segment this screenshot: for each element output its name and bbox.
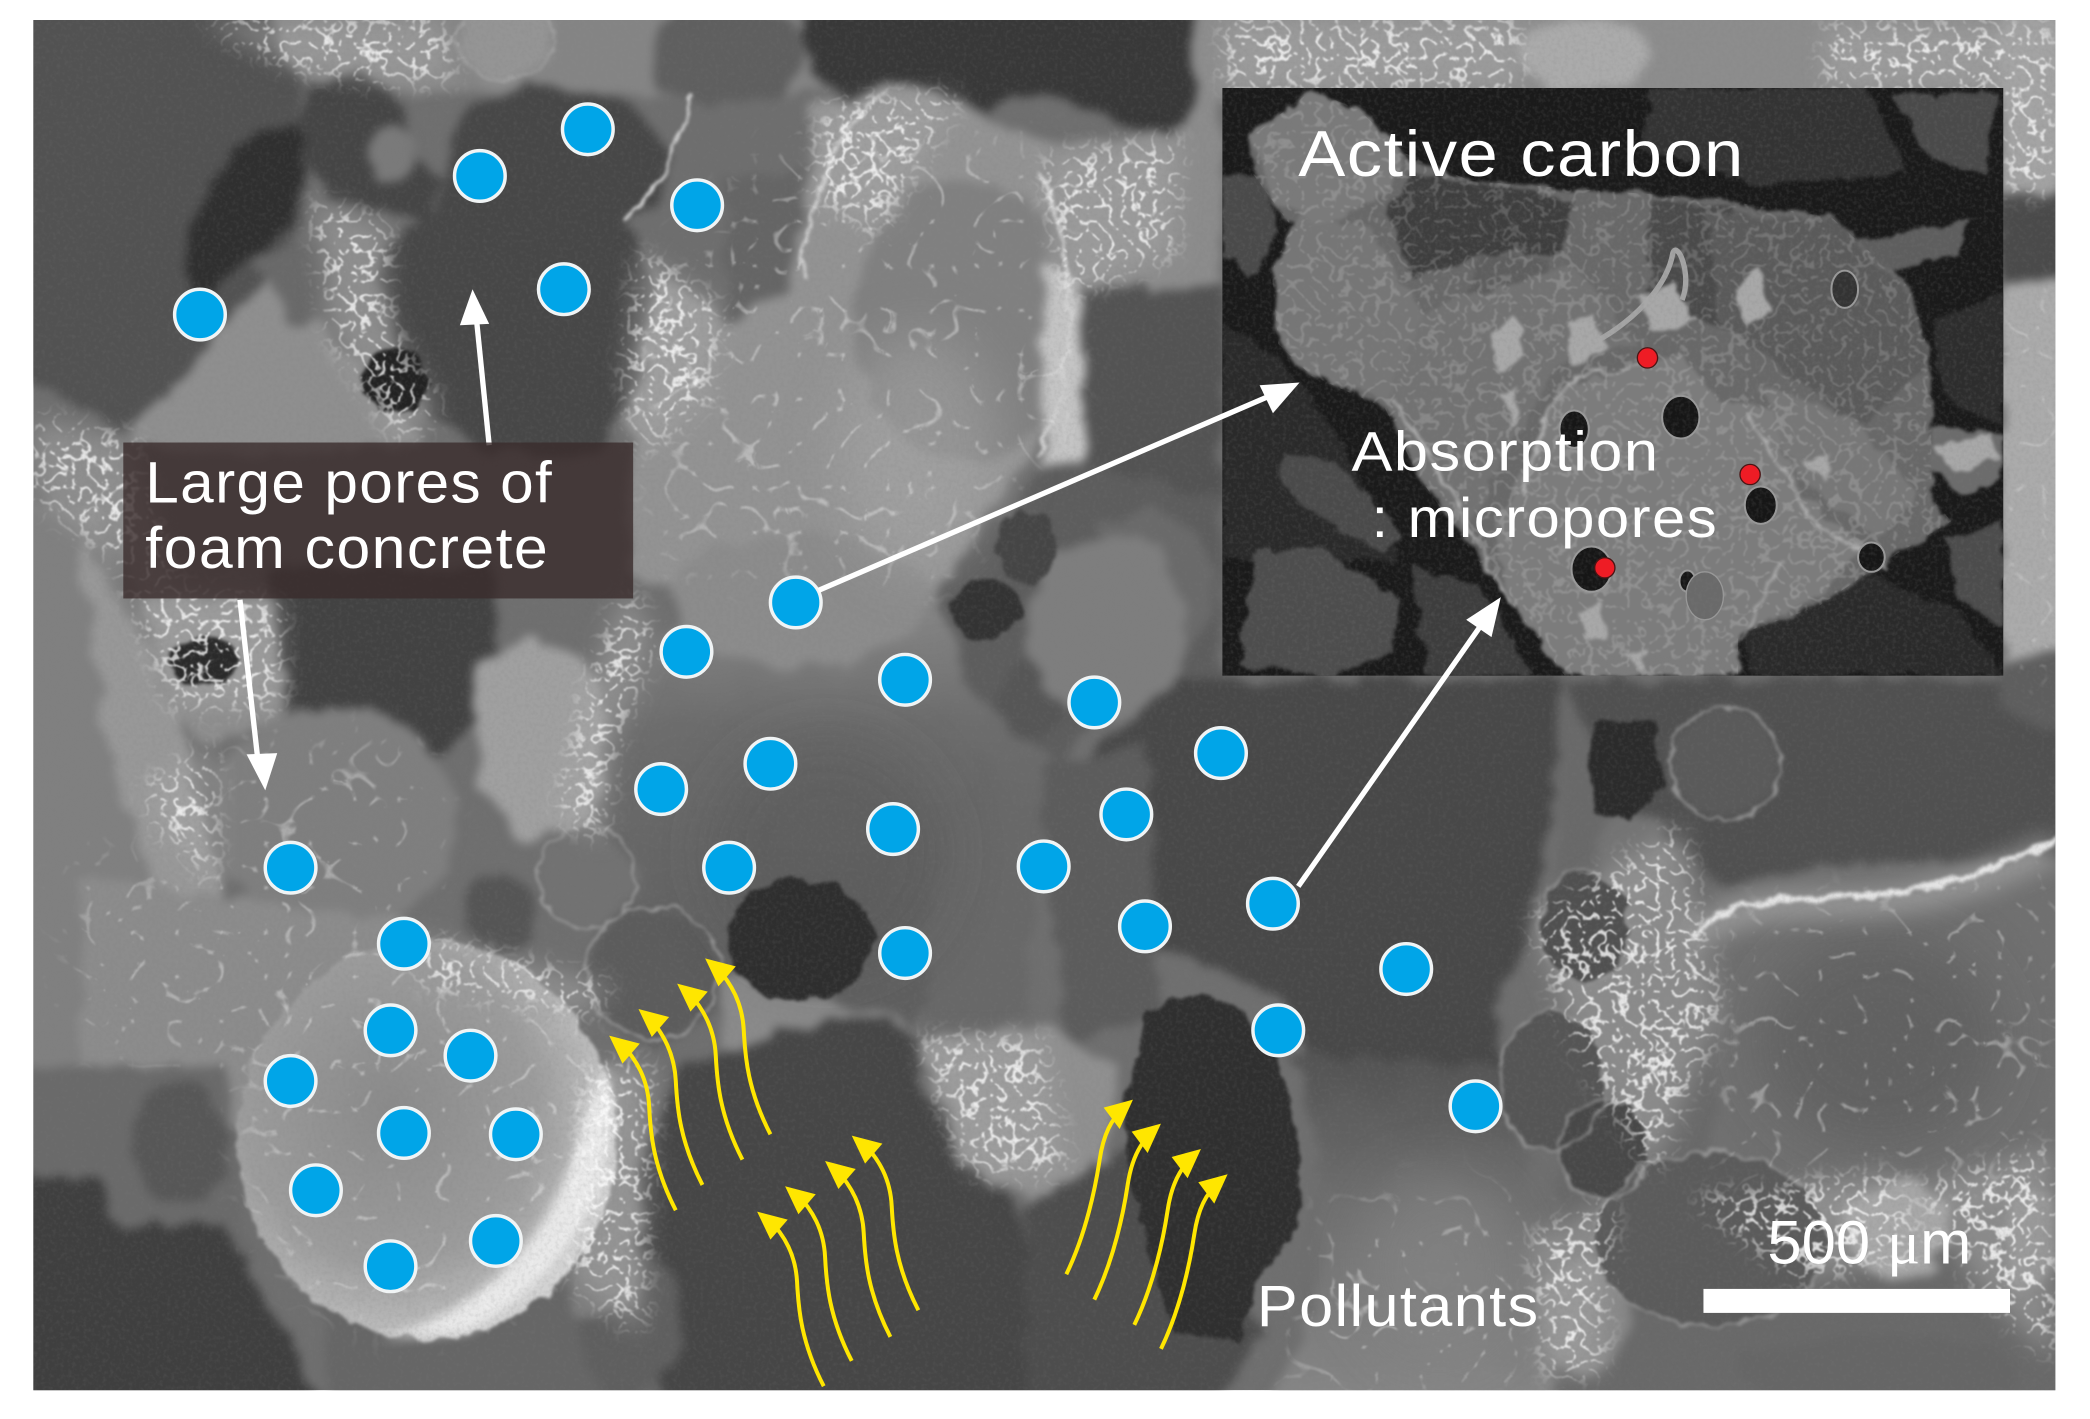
red dots: pollutants inside micropores (1595, 348, 1760, 578)
callout: large pores of foam concrete: Large pores of (145, 451, 553, 516)
label: active carbon: Active carbon (1298, 117, 1745, 190)
scale bar: 500 µm: 500 μm (1767, 1208, 1971, 1278)
blue dots: pollutant particles (175, 104, 1501, 1292)
arrow: to micropores (1298, 597, 1501, 886)
sphere bright rim (380, 1066, 611, 1340)
plate ridges (1393, 363, 1886, 640)
sphere outlines (459, 0, 1829, 1326)
scale bar: 500 µm (1703, 1208, 2010, 1313)
arrow: to lower pore (240, 600, 277, 790)
fibre (1579, 250, 1686, 349)
callout: large pores of foam concrete: foam concrete (145, 516, 549, 581)
arrow: to active carbon (818, 383, 1300, 590)
soft shading (706, 333, 1999, 1360)
label: absorption micropores: Absorption (1352, 420, 1659, 483)
yellow flow arrows: group 1 (609, 958, 770, 1210)
ridge glow (1693, 846, 2055, 940)
bright ridge lines (207, 93, 2055, 1333)
micropores (1559, 271, 1885, 592)
particle flakes (1493, 267, 1999, 673)
label: pollutants: Pollutants (1257, 1274, 1540, 1339)
yellow flow arrows: group 2 (757, 1136, 918, 1386)
label: absorption micropores: : micropores (1372, 486, 1718, 549)
yellow flow arrows: group 3 (1066, 1100, 1228, 1349)
dark spheres and holes (172, 347, 1829, 1344)
bright sphere lower left (237, 940, 616, 1340)
callout: large pores of foam concrete (123, 443, 633, 598)
arrow: to upper pore (460, 289, 489, 445)
label: absorption micropores (1352, 420, 1718, 549)
